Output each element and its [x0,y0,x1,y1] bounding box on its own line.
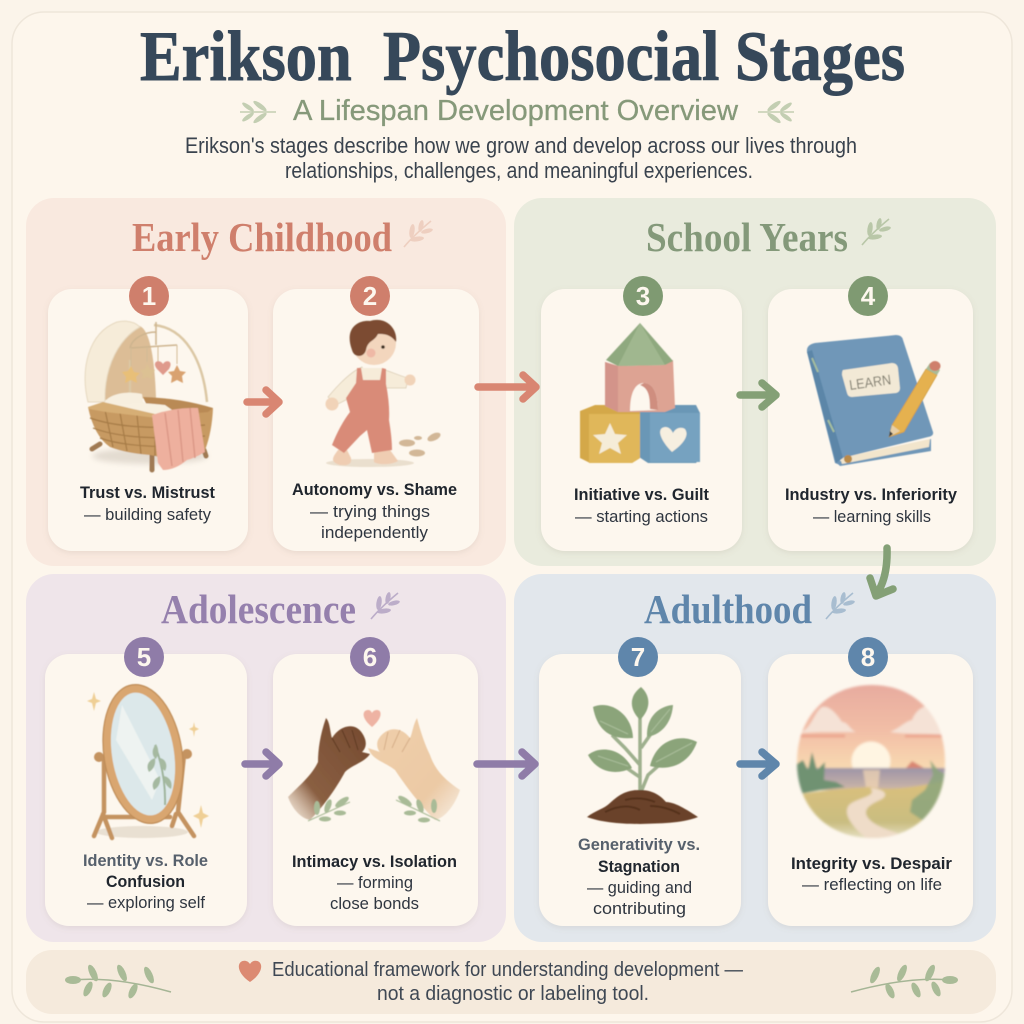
sprig left [240,99,276,125]
text: stage 7: Stagnation [598,857,680,876]
sprig [371,592,400,619]
badge 1 [129,276,169,316]
badge 1: 1 [142,281,156,311]
heading: Adolescence: Adolescence [161,586,356,632]
text: stage 3: Initiative vs. Guilt [574,485,709,504]
arrow 6 to 7 [477,752,535,776]
sprig left [65,963,171,1000]
label: LEARN [842,363,900,397]
text: stage 5: — exploring self [87,893,205,912]
icon: book and pencil: LEARN [848,371,892,393]
text: stage 3: — starting actions [575,507,708,526]
sprig [862,218,891,245]
footer band [26,950,996,1014]
text: stage 5: Identity vs. Role [83,851,208,870]
text: stage 3 [574,485,709,526]
text: stage 7: — guiding and [587,878,692,897]
badge 4 [848,276,888,316]
intro text [185,133,857,183]
footer text: Educational framework for understanding development — [272,959,743,981]
sprig [404,220,433,247]
heading: Adulthood: Adulthood [644,586,812,632]
text: stage 7: contributing [593,899,686,918]
text: stage 4: — learning skills [813,507,931,526]
text: stage 7: Generativity vs. [578,835,700,854]
text: stage 1: Trust vs. Mistrust [80,483,215,502]
text: stage 5 [83,851,208,912]
card 5 [45,637,247,926]
card 3 [541,276,742,551]
sprig right [758,99,794,125]
icon: heart [239,961,261,982]
arrow 2 to 3 [478,375,536,399]
footer text [272,959,743,1005]
badge 3: 3 [636,281,650,311]
badge 7 [618,637,658,677]
icon: bassinet [85,321,213,470]
icon: sunset landscape [795,684,946,839]
badge 8 [848,637,888,677]
panel: School Years [514,198,996,566]
text: stage 2: — trying things [310,502,430,521]
subtitle text: A Lifespan Development Overview [293,95,739,127]
card 8 [768,637,973,926]
text: stage 6: — forming [337,873,413,892]
text: stage 8: Integrity vs. Despair [791,854,952,873]
badge 5: 5 [137,642,151,672]
icon: book and pencil [807,335,940,466]
badge 2 [350,276,390,316]
icon: mirror [87,679,209,838]
text: stage 6: close bonds [330,894,419,913]
subtitle with sprigs [240,95,794,127]
icon: toddler [326,320,442,467]
text: stage 4: Industry vs. Inferiority [785,485,958,504]
panel: Adulthood [514,574,996,942]
badge 3 [623,276,663,316]
badge 8: 8 [861,642,875,672]
intro text: Erikson's stages describe how we grow and develop across our lives through [185,133,857,158]
icon: hands [288,710,460,822]
icon: seedling [587,687,698,824]
arrow 4 to 5 (down) [870,548,893,596]
card 2 [273,276,479,551]
text: stage 7 [578,835,700,918]
arrow 5 to 6 [245,752,279,776]
panel: Early Childhood [26,198,506,566]
text: stage 8 [791,854,952,894]
text: stage 2: independently [321,523,428,542]
badge 2: 2 [363,281,377,311]
card 1 [48,276,248,551]
badge 6 [350,637,390,677]
arrow 7 to 8 [740,752,776,776]
text: stage 1: — building safety [84,505,211,524]
badge 5 [124,637,164,677]
intro text: relationships, challenges, and meaningful experiences. [285,158,753,183]
heading: School Years: School Years [646,214,848,260]
arrow 3 to 4 [740,383,776,407]
card 6 [273,637,478,926]
text: stage 5: Confusion [106,872,185,891]
footer text: not a diagnostic or labeling tool. [377,983,649,1005]
card 7 [539,637,741,926]
badge 6: 6 [363,642,377,672]
text: stage 2: Autonomy vs. Shame [292,480,457,499]
title: Erikson Psychosocial Stages [140,18,905,96]
panel: Adolescence [26,574,506,942]
text: stage 4 [785,485,958,526]
badge 4: 4 [861,281,876,311]
arrow 1 to 2 [247,390,279,414]
text: stage 2 [292,480,457,542]
card 4 [768,276,973,551]
badge 7: 7 [631,642,645,672]
sprig [826,592,855,619]
text: stage 8: — reflecting on life [802,875,942,894]
text: stage 6 [292,852,457,913]
text: stage 6: Intimacy vs. Isolation [292,852,457,871]
text: stage 1 [80,483,215,524]
icon: blocks [580,323,700,463]
heading: Early Childhood: Early Childhood [132,214,392,260]
sprig right [851,963,958,1000]
